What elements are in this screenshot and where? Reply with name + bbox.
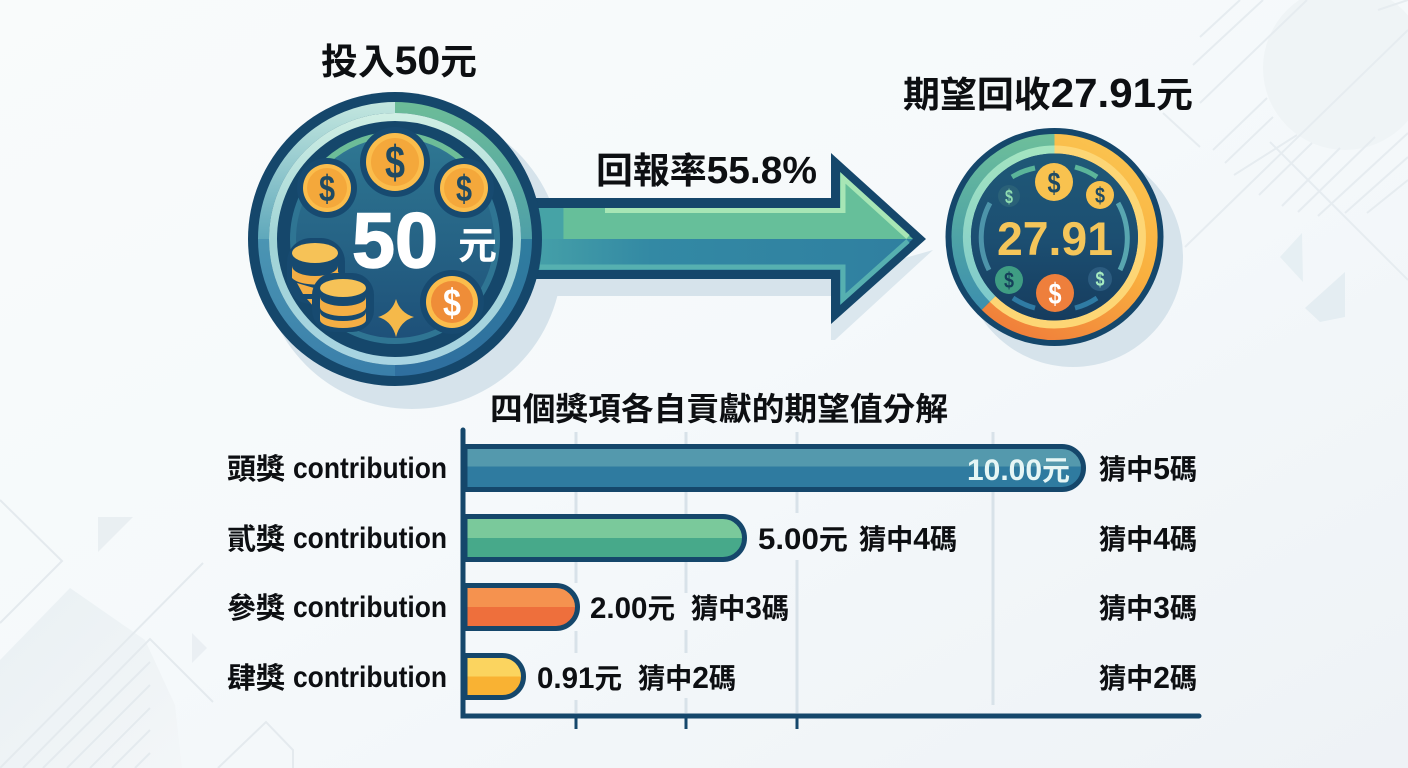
unit: yuan: 元 (458, 226, 497, 268)
label: fourth prize: 肆獎 (227, 662, 285, 695)
value: first prize: 10.00元 (967, 454, 1070, 487)
label: first prize (227, 452, 447, 486)
coin: bottom: $ (1048, 278, 1062, 311)
coin: left (297, 158, 357, 218)
label: second prize: contribution (293, 522, 447, 555)
shadows under circles and arrow (262, 109, 1183, 409)
right column: matches (1099, 451, 1197, 695)
coin: top (360, 127, 430, 197)
coin: upper left (998, 185, 1020, 208)
background decoration: top right (1163, 0, 1408, 322)
coin: top: $ (1048, 167, 1061, 200)
label: third prize: contribution (293, 591, 447, 624)
label: third prize (227, 591, 447, 625)
coin stack: front (312, 273, 374, 332)
heading: contribution breakdown: 四個獎項各自貢獻的期望值分解 (490, 391, 948, 427)
label: fourth prize: contribution (293, 661, 447, 694)
value: third prize: 2.00元 (590, 592, 675, 625)
coin: bottom right: $ (443, 282, 461, 325)
label: second prize (227, 522, 447, 556)
icon: expected return circle 27.91 (946, 128, 1164, 346)
background decoration: bottom left (0, 500, 293, 768)
heading: return rate: 回報率55.8% (596, 150, 817, 192)
icon: investment circle 50 yuan (248, 92, 542, 386)
bar: third prize (465, 586, 578, 628)
coin: left: $ (319, 168, 335, 209)
match: 3 numbers: 猜中3碼 (1099, 590, 1197, 625)
bar: first prize (465, 446, 1084, 490)
coin: bottom right (420, 270, 484, 334)
coin: upper left: $ (1005, 187, 1013, 208)
coin: lower right (1088, 267, 1112, 291)
label: third prize: 參獎 (227, 592, 285, 625)
label: second prize: 貳獎 (227, 523, 285, 556)
match: second prize inline: 猜中4碼 (859, 521, 957, 556)
coin: top (1035, 163, 1073, 201)
coin: lower right: $ (1096, 269, 1104, 291)
match: third prize inline: 猜中3碼 (691, 590, 789, 625)
row labels (227, 452, 447, 695)
coin stack: back (287, 238, 345, 307)
coin: lower left (995, 266, 1023, 294)
coin: right: $ (456, 168, 472, 209)
label: first prize: 頭獎 (227, 453, 285, 486)
heading: invest: 投入50元 (321, 39, 477, 83)
value: fourth prize: 0.91元 (537, 662, 622, 695)
match: 5 numbers: 猜中5碼 (1099, 451, 1197, 486)
heading: expected return: 期望回收27.91元 (903, 70, 1193, 116)
amount: 50: 50 (352, 196, 438, 284)
bar: fourth prize (465, 656, 524, 698)
coin: upper right: $ (1095, 183, 1105, 208)
axes (463, 430, 1199, 716)
value: second prize: 5.00元 (758, 523, 848, 556)
label: first prize: contribution (293, 452, 447, 485)
amount: 27.91: 27.91 (997, 212, 1113, 265)
bar chart: prize contributions (463, 430, 1199, 729)
coin: upper right (1086, 181, 1114, 209)
bar: second prize (465, 516, 744, 560)
match: 2 numbers: 猜中2碼 (1099, 660, 1197, 695)
coin: bottom (1036, 274, 1074, 312)
match: fourth prize inline: 猜中2碼 (638, 660, 736, 695)
icon: sparkle (378, 299, 414, 337)
label: fourth prize (227, 661, 447, 695)
match: 4 numbers: 猜中4碼 (1099, 521, 1197, 556)
coin: right (434, 158, 494, 218)
arrow: return rate (530, 153, 926, 324)
coin: lower left: $ (1004, 268, 1014, 293)
coin: top: $ (385, 136, 405, 188)
